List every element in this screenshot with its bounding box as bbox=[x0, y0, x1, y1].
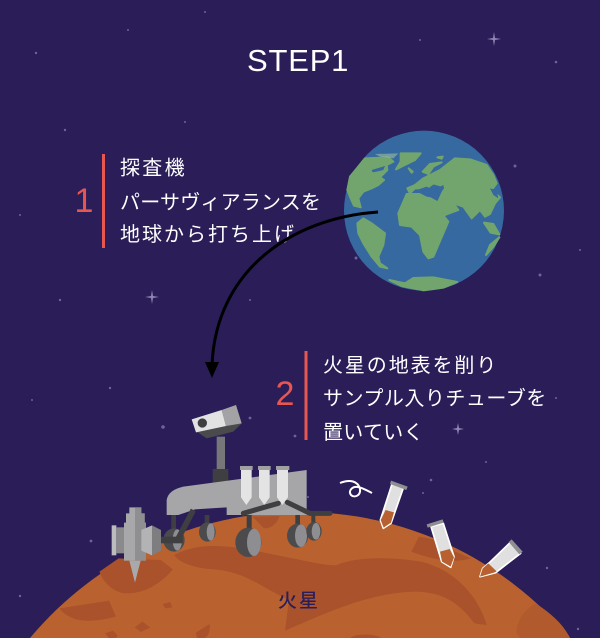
rover arms bbox=[178, 502, 330, 538]
step 1 divider bbox=[102, 154, 105, 248]
step 2 divider bbox=[304, 351, 308, 440]
mars label: 火星 bbox=[278, 591, 320, 612]
step 2 text: 置いていく bbox=[323, 422, 424, 444]
tube 1 bbox=[380, 481, 408, 528]
step 1 text: 地球から打ち上げ bbox=[120, 223, 296, 246]
step 1 text: パーサヴィアランスを bbox=[120, 191, 321, 214]
arrow: earth to mars bbox=[205, 212, 378, 378]
step 2 text: 火星の地表を削り bbox=[323, 354, 498, 377]
step 2 text bbox=[323, 354, 547, 444]
dropped sample tubes bbox=[380, 481, 523, 577]
rover body bbox=[167, 470, 307, 515]
squiggle: tube motion bbox=[340, 481, 372, 496]
mars surface patches bbox=[59, 516, 570, 638]
rover bbox=[159, 405, 330, 557]
step 2 callout bbox=[276, 351, 547, 444]
step 1 number: 1 bbox=[75, 182, 93, 220]
step 2 text: サンプル入りチューブを bbox=[323, 386, 547, 410]
icon: earth bbox=[344, 131, 504, 291]
rover camera mast bbox=[192, 405, 242, 483]
step 1 callout bbox=[75, 154, 321, 248]
title: STEP1 bbox=[247, 43, 349, 78]
drill bbox=[112, 507, 161, 583]
sparkle star: lower right bbox=[452, 423, 464, 435]
step 1 text: 探査機 bbox=[120, 156, 187, 180]
sparkle star: left bbox=[145, 290, 159, 304]
step 1 text bbox=[120, 156, 321, 246]
rover sample tubes bbox=[240, 466, 289, 505]
step 2 number: 2 bbox=[276, 375, 294, 413]
sparkle star: top right bbox=[487, 32, 501, 46]
tube 2 bbox=[427, 519, 454, 567]
tube 3 bbox=[480, 539, 523, 577]
mars bbox=[30, 512, 570, 638]
rover legs and wheels bbox=[159, 513, 322, 557]
